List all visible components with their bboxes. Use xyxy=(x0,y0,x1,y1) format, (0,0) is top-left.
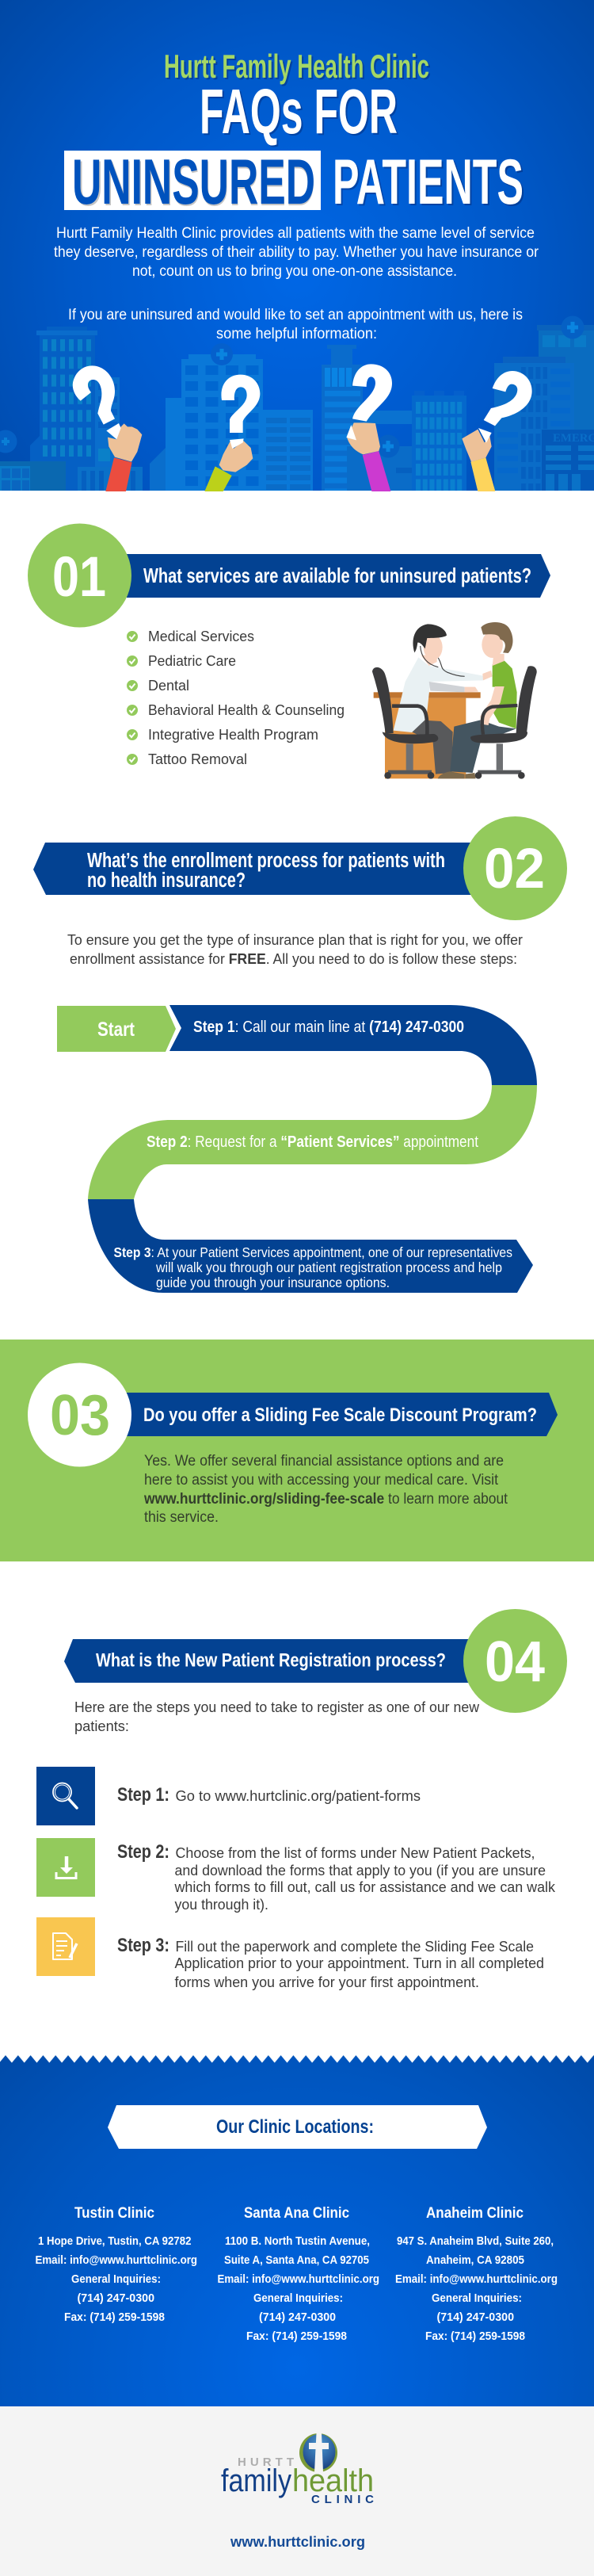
location: Tustin Clinic: Tustin Clinic xyxy=(74,2204,154,2222)
step 2 path segment xyxy=(88,1085,537,1199)
step 3 path segment: guide you through your insurance options. xyxy=(156,1275,390,1290)
step 3 text: Fill out the paperwork and complete the Sliding Fee Scale xyxy=(176,1939,534,1955)
step 1 text xyxy=(117,1784,421,1806)
location: Tustin Clinic: 1 Hope Drive, Tustin, CA 92782 xyxy=(38,2234,192,2248)
banner heading 01 xyxy=(127,554,550,598)
city skyline background xyxy=(0,315,594,491)
services checklist: Pediatric Care xyxy=(148,652,236,669)
number badge 04: 04 xyxy=(485,1630,545,1694)
icon: hand holding question mark 2 xyxy=(204,375,260,491)
location: Santa Ana Clinic: (714) 247-0300 xyxy=(259,2310,336,2324)
intro text: some helpful information: xyxy=(216,325,377,342)
location: Santa Ana Clinic xyxy=(217,2204,379,2343)
step 3 text: forms when you arrive for your first appointment. xyxy=(174,1974,479,1990)
panel: clinic locations xyxy=(0,2055,594,2406)
number badge 02 xyxy=(463,816,567,920)
sliding fee answer text: this service. xyxy=(144,1509,219,1526)
location: Anaheim Clinic: Anaheim Clinic xyxy=(426,2204,524,2222)
banner heading 04 xyxy=(64,1639,475,1683)
logo: Hurtt Family Health Clinic xyxy=(221,2433,374,2506)
step 3 text xyxy=(117,1935,544,1990)
intro text xyxy=(54,224,539,342)
panel: hero header xyxy=(0,0,594,491)
enrollment intro text: To ensure you get the type of insurance plan that is right for you, we offer xyxy=(67,931,523,948)
start arrow xyxy=(57,1006,176,1052)
enrollment intro text xyxy=(67,931,523,967)
services checklist: Integrative Health Program xyxy=(148,726,318,743)
step 2 text: Step 2: xyxy=(117,1841,169,1863)
step 2 text: which forms to fill out, call us for assistance and we can walk xyxy=(174,1879,556,1895)
step 3 text: Application prior to your appointment. Turn in all completed xyxy=(174,1955,544,1971)
icon: magnifier step 1 xyxy=(36,1767,95,1825)
step 1 text: Step 1: xyxy=(117,1784,169,1806)
step 2 text: and download the forms that apply to you (if you are unsure xyxy=(174,1863,546,1878)
registration intro text: Here are the steps you need to take to register as one of our new xyxy=(74,1699,480,1715)
step 3 text: Step 3: xyxy=(117,1935,169,1956)
step 3 path segment: will walk you through our patient registration process and help xyxy=(155,1259,502,1275)
icon: hand holding question mark 1 xyxy=(73,365,142,491)
icon: download step 2 xyxy=(36,1838,95,1897)
logo: Hurtt Family Health Clinic: family xyxy=(221,2463,291,2498)
step 2 text: Choose from the list of forms under New Patient Packets, xyxy=(176,1845,535,1861)
location: Santa Ana Clinic: 1100 B. North Tustin Avenue, xyxy=(225,2234,370,2248)
location: Anaheim Clinic: Anaheim, CA 92805 xyxy=(426,2253,524,2267)
banner heading 02: What’s the enrollment process for patients with xyxy=(87,850,445,872)
services checklist: Behavioral Health & Counseling xyxy=(148,701,345,718)
step 1 path segment xyxy=(169,1005,537,1085)
location: Santa Ana Clinic: General Inquiries: xyxy=(253,2291,343,2305)
sliding fee answer text: www.hurttclinic.org/sliding-fee-scale to learn more about xyxy=(143,1491,508,1508)
location: Anaheim Clinic: 947 S. Anaheim Blvd, Suite 260, xyxy=(397,2234,554,2248)
panel: section 03 sliding fee xyxy=(0,1340,594,1561)
step 2 text xyxy=(117,1841,556,1913)
logo: Hurtt Family Health Clinic: HURTT xyxy=(238,2456,294,2469)
services checklist: Medical Services xyxy=(148,628,254,644)
step 1 text: Go to www.hurtclinic.org/patient-forms xyxy=(176,1788,421,1804)
intro text: not, count on us to bring you one-on-one assistance. xyxy=(132,262,457,280)
panel: footer xyxy=(0,2406,594,2576)
step 2 path segment: Step 2: Request for a “Patient Services” appointment xyxy=(147,1133,478,1151)
location: Tustin Clinic xyxy=(35,2204,197,2324)
banner heading 02 xyxy=(33,843,475,895)
panel: section 04 registration xyxy=(36,1609,567,1990)
banner heading 02: no health insurance? xyxy=(87,869,246,892)
logo: Hurtt Family Health Clinic: CLINIC xyxy=(311,2493,374,2506)
location: Tustin Clinic: Fax: (714) 259-1598 xyxy=(64,2310,165,2324)
panel: section 02 enrollment xyxy=(33,816,567,1293)
sliding fee answer text xyxy=(143,1453,508,1526)
title highlight: UNINSURED xyxy=(64,147,321,220)
banner heading 03 xyxy=(127,1393,558,1436)
website url: www.hurttclinic.org xyxy=(230,2534,365,2550)
number badge 02: 02 xyxy=(484,838,545,900)
location: Santa Ana Clinic: Suite A, Santa Ana, CA 92705 xyxy=(224,2253,369,2267)
banner heading 04: What is the New Patient Registration process? xyxy=(96,1650,446,1671)
number badge 03: 03 xyxy=(50,1384,110,1447)
title highlight: UNINSURED: UNINSURED xyxy=(74,148,315,220)
logo emblem: globe and cross xyxy=(299,2433,337,2472)
step 2 text: you through it). xyxy=(174,1897,268,1913)
icon: hand holding question mark 4 xyxy=(462,371,532,491)
number badge 01 xyxy=(28,523,131,628)
enrollment intro text: enrollment assistance for FREE. All you need to do is follow these steps: xyxy=(70,950,517,967)
location: Santa Ana Clinic: Email: info@www.hurttclinic.org xyxy=(217,2272,379,2286)
illustration: doctor examining patient xyxy=(372,622,537,779)
subtitle: Hurtt Family Health Clinic xyxy=(164,48,429,85)
heading: our clinic locations: Our Clinic Locations: xyxy=(216,2116,374,2138)
location: Anaheim Clinic: Email: info@www.hurttclinic.org xyxy=(395,2272,558,2286)
number badge 04 xyxy=(463,1609,567,1713)
location: Anaheim Clinic: (714) 247-0300 xyxy=(437,2310,514,2324)
step 3 path segment xyxy=(88,1199,533,1293)
location: Santa Ana Clinic: Fax: (714) 259-1598 xyxy=(246,2329,347,2343)
services checklist: Dental xyxy=(148,677,189,694)
location: Tustin Clinic: General Inquiries: xyxy=(71,2272,161,2286)
start arrow: Start xyxy=(97,1019,135,1041)
location: Anaheim Clinic: Fax: (714) 259-1598 xyxy=(425,2329,525,2343)
number badge 03 xyxy=(28,1363,131,1466)
icon: hand holding question mark 3 xyxy=(346,364,392,491)
sliding fee answer text: Yes. We offer several financial assistance options and are xyxy=(144,1453,504,1470)
panel: section 01 services xyxy=(28,523,550,779)
title line: FAQs FOR: FAQs FOR xyxy=(200,76,398,147)
intro text: they deserve, regardless of their ability to pay. Whether you have insurance or xyxy=(54,243,539,261)
services checklist: Tattoo Removal xyxy=(148,751,247,767)
registration intro text xyxy=(74,1699,480,1734)
location: Tustin Clinic: Email: info@www.hurttclinic.org xyxy=(35,2253,197,2267)
intro text: Hurtt Family Health Clinic provides all patients with the same level of service xyxy=(56,224,535,242)
number badge 01: 01 xyxy=(52,546,106,609)
registration intro text: patients: xyxy=(74,1718,129,1734)
intro text: If you are uninsured and would like to set an appointment with us, here is xyxy=(68,306,523,323)
location: Anaheim Clinic xyxy=(395,2204,558,2343)
title highlight: UNINSURED: UNINSURED xyxy=(72,147,315,218)
step 3 path segment: Step 3: At your Patient Services appointment, one of our representatives xyxy=(114,1244,512,1260)
sliding fee answer text: here to assist you with accessing your medical care. Visit xyxy=(144,1472,499,1489)
logo: Hurtt Family Health Clinic: health xyxy=(292,2463,374,2498)
location: Tustin Clinic: (714) 247-0300 xyxy=(78,2291,154,2305)
heading: our clinic locations xyxy=(108,2105,487,2149)
step 1 path segment: Step 1: Call our main line at (714) 247-0300 xyxy=(193,1019,464,1036)
icon: document step 3 xyxy=(36,1917,95,1976)
services checklist xyxy=(127,628,345,767)
location: Anaheim Clinic: General Inquiries: xyxy=(432,2291,522,2305)
location: Santa Ana Clinic: Santa Ana Clinic xyxy=(244,2204,349,2222)
